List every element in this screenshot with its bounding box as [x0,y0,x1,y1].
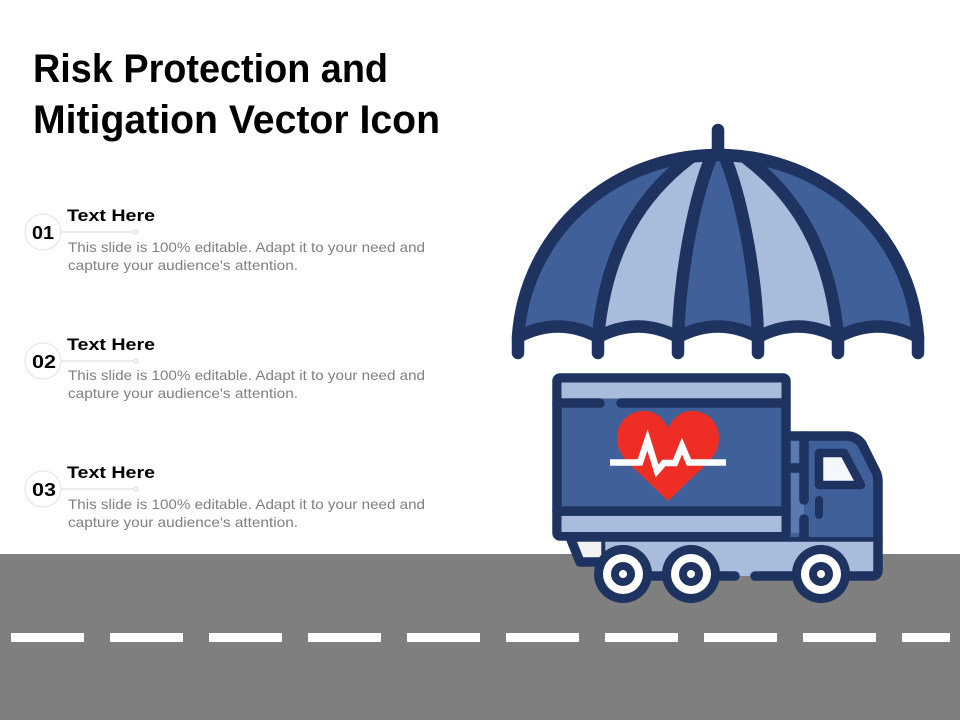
list item 01: capture your audience's attention. [68,257,298,273]
title: Risk Protection and [33,47,388,91]
truck cab [786,436,878,537]
list item 03: This slide is 100% editable. Adapt it to your need and [68,496,425,512]
cargo box [557,378,786,536]
list item 02: This slide is 100% editable. Adapt it to your need and [68,367,425,383]
list item 02: Text Here [67,335,155,354]
list item 01: 01 [32,223,54,243]
list item 02: capture your audience's attention. [68,385,298,401]
road [0,554,960,720]
cab window [819,453,861,485]
title: Mitigation Vector Icon [33,98,440,142]
list item 01: Text Here [67,206,155,225]
wheels [594,545,850,603]
icon: umbrella [518,130,918,353]
icon: delivery truck [557,378,878,603]
heart with pulse [610,411,726,501]
title [33,47,440,142]
list item 03 [25,463,425,530]
list item 01 [25,206,425,273]
list item 03: capture your audience's attention. [68,514,298,530]
list item 02: 02 [32,352,56,372]
list item 03: 03 [32,480,56,500]
truck chassis [605,537,878,576]
list item 03: Text Here [67,463,155,482]
list item 01: This slide is 100% editable. Adapt it to your need and [68,239,425,255]
list item 02 [25,335,425,401]
truck rear bumper [570,537,606,562]
